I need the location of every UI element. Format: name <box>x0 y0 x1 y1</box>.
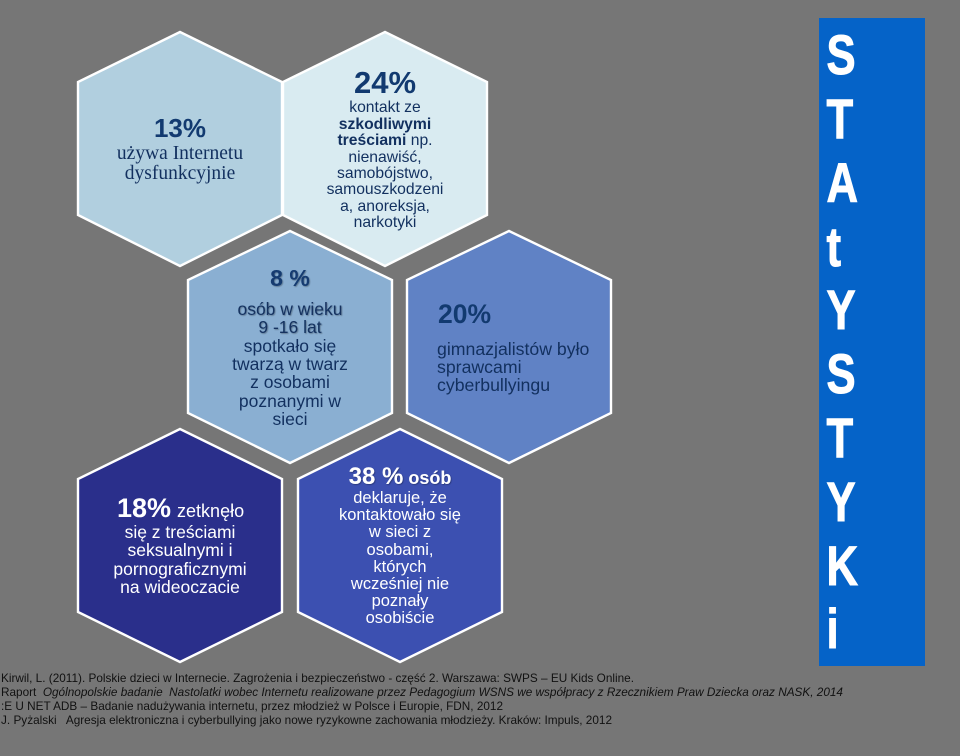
sidebar: STAtYSTYKi vertical title: Y <box>826 279 856 341</box>
hexagon: 18% sexual content: na wideoczacie <box>120 577 240 597</box>
hexagon: 18% sexual content: się z treściami <box>125 522 235 542</box>
hexagon: 8% met face to face: poznanymi w <box>239 391 341 411</box>
sidebar: STAtYSTYKi vertical title: T <box>826 88 853 150</box>
hexagon: 20% cyberbullying perpetrators: gimnazjalistów było <box>437 339 590 359</box>
sidebar: STAtYSTYKi vertical title: T <box>826 407 853 469</box>
hexagon: 24% harmful content: narkotyki <box>354 214 416 231</box>
sidebar: STAtYSTYKi vertical title: t <box>826 216 841 278</box>
hexagon: 24% harmful content: nienawiść, <box>348 149 422 166</box>
sidebar: STAtYSTYKi vertical title <box>819 18 925 666</box>
hexagon: 24% harmful content: samouszkodzeni <box>327 181 443 198</box>
hexagon: 8% met face to face: z osobami <box>250 372 330 392</box>
hexagon: 8% met face to face: 8 % <box>270 265 310 291</box>
hexagon: 24% harmful content: kontakt ze <box>349 99 421 116</box>
hexagon: 38% contacted strangers: deklaruje, że <box>353 489 447 507</box>
sidebar: STAtYSTYKi vertical title: K <box>826 535 858 597</box>
hexagon: 8% met face to face: osób w wieku <box>237 299 343 319</box>
hexagon: 8% met face to face: spotkało się <box>244 336 336 356</box>
sidebar: STAtYSTYKi vertical title: A <box>826 152 858 214</box>
hexagon: 38% contacted strangers: osobiście <box>366 609 434 627</box>
sidebar: STAtYSTYKi vertical title: Y <box>826 471 856 533</box>
hexagon: 20% cyberbullying perpetrators: cyberbullyingu <box>437 375 550 395</box>
hexagon: 24% harmful content: a, anoreksja, <box>340 198 430 215</box>
sources: J. Pyżalski Agresja elektroniczna i cyberbullying jako nowe ryzykowne zachowania młodzieży. Kraków: Impuls, 2012 <box>1 713 612 727</box>
hexagon: 18% sexual content: seksualnymi i <box>127 540 233 560</box>
hexagon: 20% cyberbullying perpetrators: 20% <box>438 299 491 329</box>
hexagon: 13% dysfunctional use: używa Internetu <box>117 143 243 164</box>
hexagon: 24% harmful content: samobójstwo, <box>337 165 433 182</box>
hexagon: 24% harmful content <box>283 32 487 266</box>
sidebar: STAtYSTYKi vertical title: S <box>826 24 856 86</box>
sidebar: STAtYSTYKi vertical title: i <box>826 598 839 660</box>
sources <box>1 671 843 727</box>
hexagon: 24% harmful content: 24% <box>354 65 416 100</box>
hexagon: 38% contacted strangers: 38 % osób <box>349 463 451 490</box>
hexagon: 38% contacted strangers: osobami, <box>367 541 433 559</box>
hexagon: 24% harmful content: szkodliwymi <box>339 116 431 133</box>
hexagon: 8% met face to face: 9 -16 lat <box>258 317 322 337</box>
hexagon: 8% met face to face: sieci <box>272 409 308 429</box>
hexagon: 8% met face to face <box>188 231 392 463</box>
hexagon: 38% contacted strangers: kontaktowało się <box>339 506 461 524</box>
hexagon: 38% contacted strangers <box>298 429 502 662</box>
hexagon: 8% met face to face: twarzą w twarz <box>232 354 348 374</box>
sources: Raport Ogólnopolskie badanie Nastolatki wobec Internetu realizowane przez Pedagogium WSNS we współpracy z Rzecznikiem Praw Dziecka oraz NASK, 2014 <box>1 685 843 699</box>
hexagon: 38% contacted strangers: w sieci z <box>368 523 431 541</box>
hexagon: 13% dysfunctional use <box>78 32 282 266</box>
hexagon: 18% sexual content: pornograficznymi <box>113 559 247 579</box>
sources: :E U NET ADB – Badanie nadużywania internetu, przez młodzież w Polsce i Europie, FDN, 2012 <box>1 699 503 713</box>
hexagon: 20% cyberbullying perpetrators <box>407 231 611 463</box>
hexagon: 13% dysfunctional use: 13% <box>154 113 206 143</box>
hexagon: 38% contacted strangers: wcześniej nie <box>350 575 449 593</box>
hexagon: 18% sexual content: 18% zetknęło <box>117 493 244 523</box>
sidebar: STAtYSTYKi vertical title: S <box>826 343 856 405</box>
hexagon: 18% sexual content <box>78 429 282 662</box>
hexagon: 20% cyberbullying perpetrators: sprawcami <box>437 357 522 377</box>
hexagon: 24% harmful content: treściami np. <box>337 132 433 149</box>
hexagon: 13% dysfunctional use: dysfunkcyjnie <box>125 163 235 184</box>
hexagon: 38% contacted strangers: poznały <box>372 592 429 610</box>
sources: Kirwil, L. (2011). Polskie dzieci w Internecie. Zagrożenia i bezpieczeństwo - część 2. Warszawa: SWPS – EU Kids Online. <box>1 671 634 685</box>
hexagon: 38% contacted strangers: których <box>373 558 427 576</box>
